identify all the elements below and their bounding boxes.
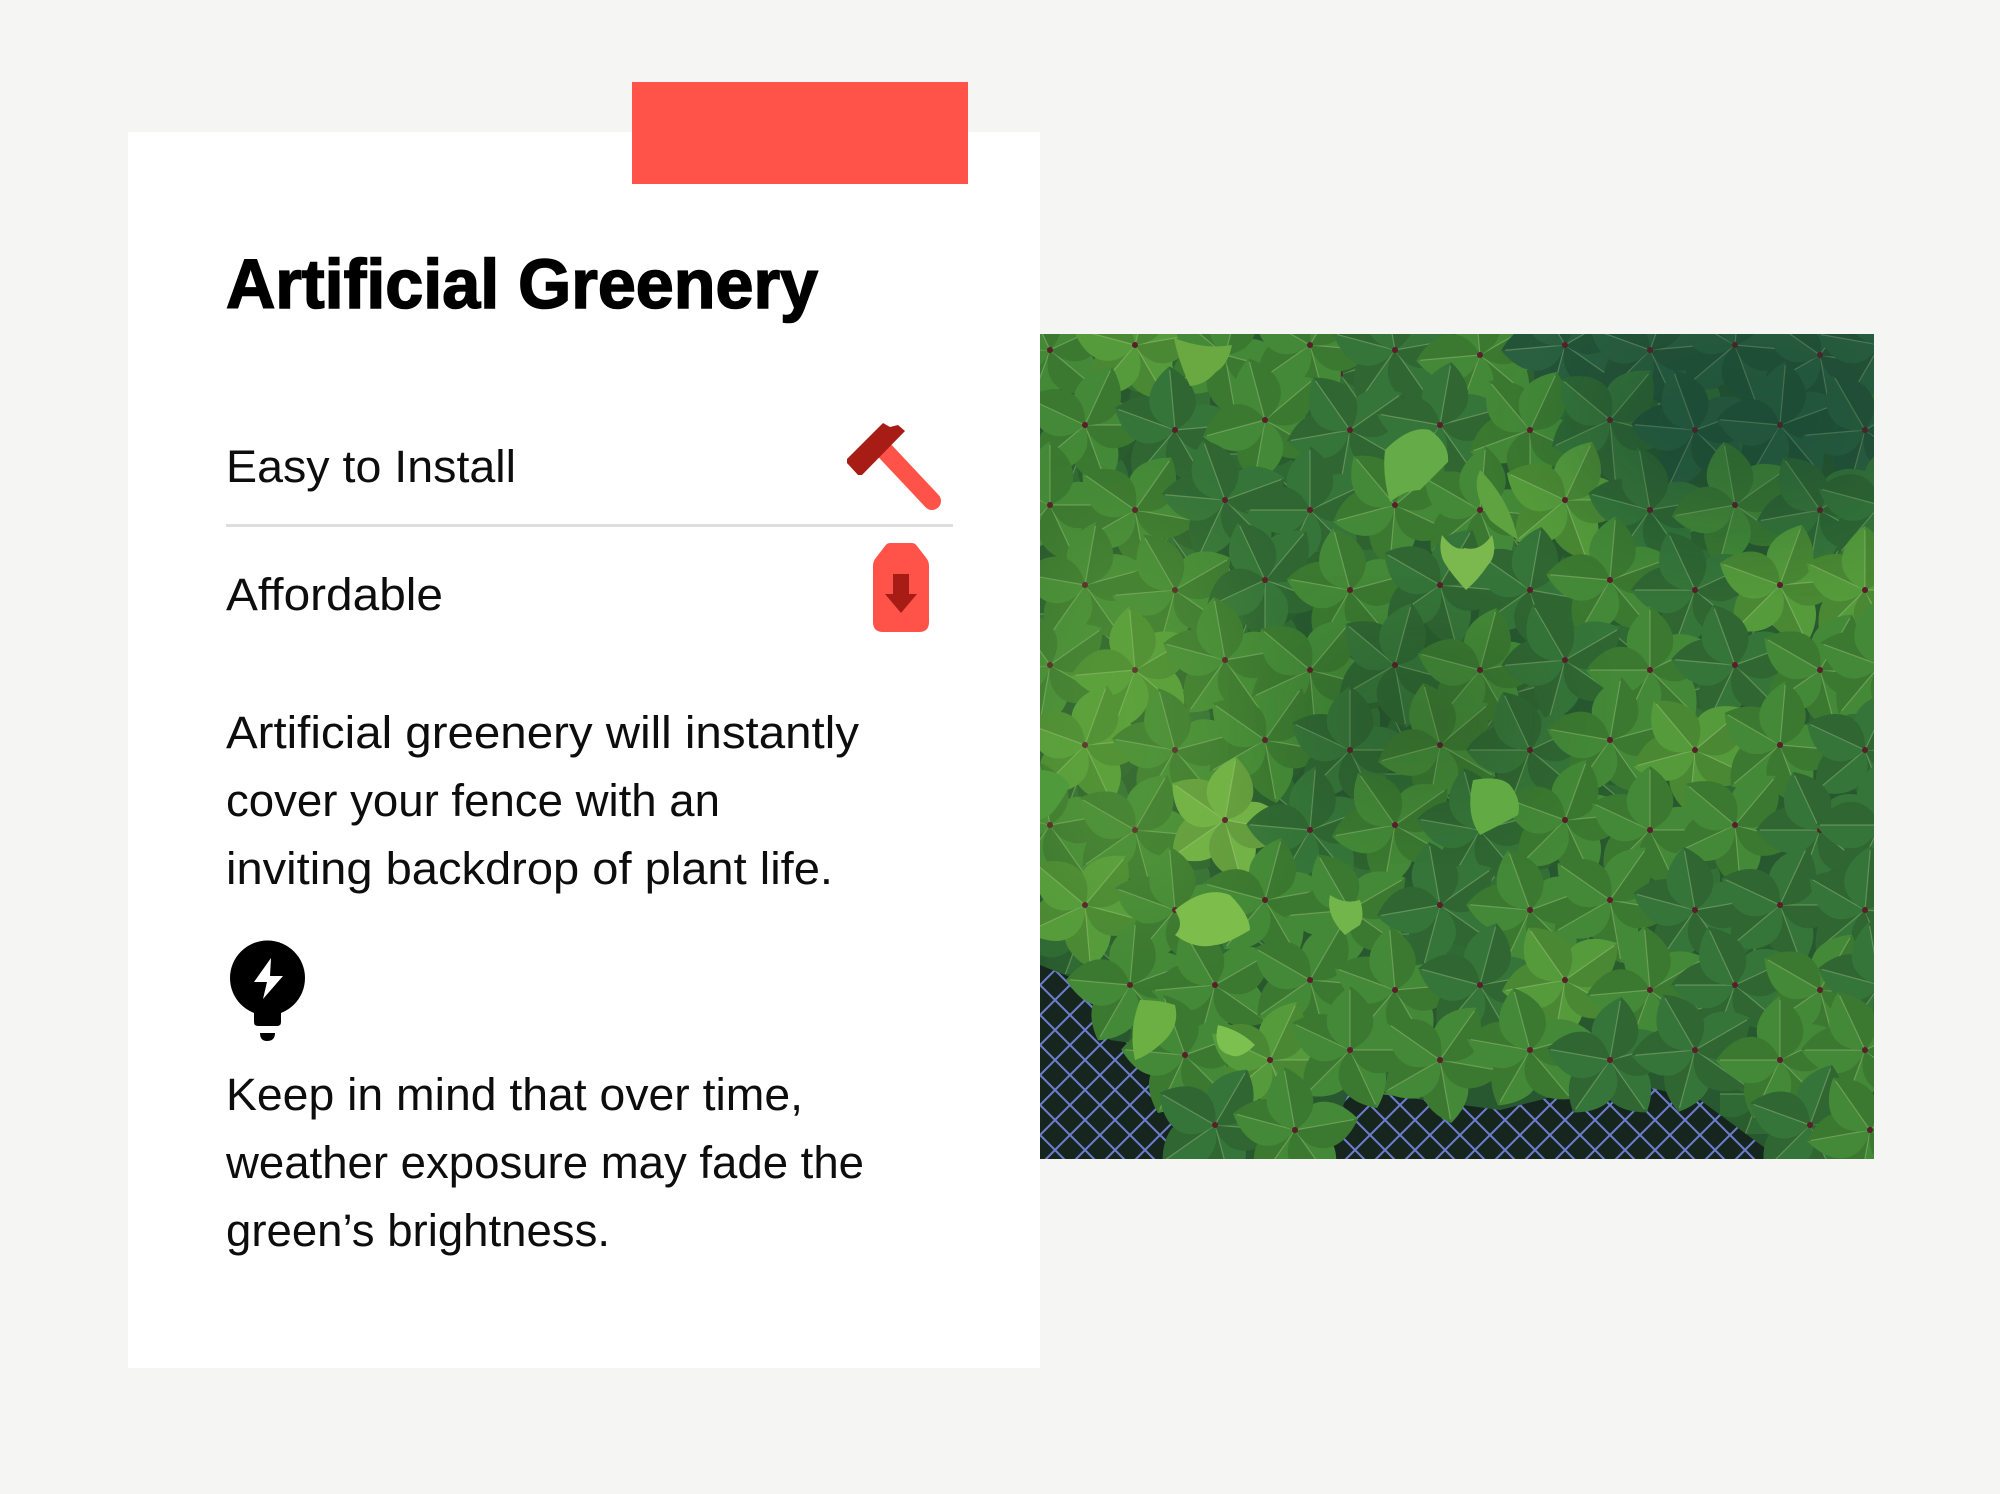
body text: tip: Keep in mind that over time, [226, 1069, 803, 1120]
photo: green vines on chain-link fence [1040, 334, 1874, 1159]
feature row: easy to install: Easy to Install [226, 441, 516, 492]
low-frequency light and shade [1570, 310, 1910, 530]
panel: white card [128, 132, 1040, 1368]
icon: hammer [847, 423, 932, 501]
icon: light bulb with bolt [230, 940, 305, 1041]
title: Artificial Greenery [226, 245, 818, 323]
body text: tip: weather exposure may fade the [225, 1137, 864, 1188]
body text: description: inviting backdrop of plant life. [226, 843, 833, 894]
red tab [632, 82, 968, 184]
icon: price tag with down arrow [873, 543, 929, 632]
body text: description: Artificial greenery will instantly [226, 707, 860, 758]
body text: tip: green’s brightness. [226, 1205, 610, 1256]
feature row: affordable: Affordable [226, 569, 443, 620]
body text: tip [225, 1069, 864, 1256]
highlighted large leaves [1174, 338, 1232, 386]
body text: description [226, 707, 860, 894]
divider [226, 524, 953, 527]
body text: description: cover your fence with an [226, 775, 720, 826]
